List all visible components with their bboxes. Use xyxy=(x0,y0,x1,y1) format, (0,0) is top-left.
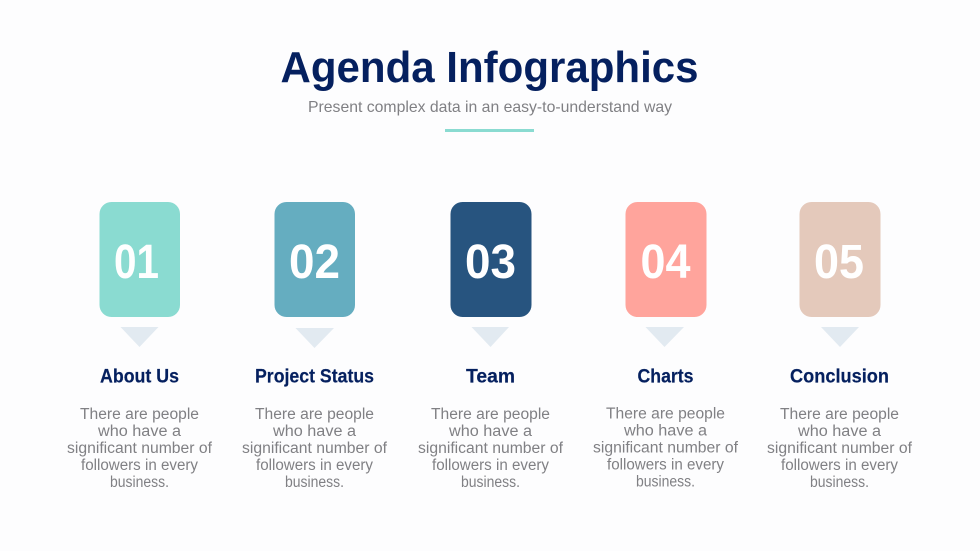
body text 02: business. xyxy=(285,474,344,491)
title underline xyxy=(445,129,534,132)
body text 03: followers in every xyxy=(432,457,549,474)
body text 01: significant number of xyxy=(67,440,213,457)
heading: About Us: About Us xyxy=(100,366,179,388)
number 05: 05 xyxy=(814,236,864,289)
pointer triangle 05 xyxy=(821,327,859,347)
panel: 04 Charts xyxy=(593,202,739,490)
body text 01: who have a xyxy=(97,423,181,440)
body text 03: who have a xyxy=(448,423,532,440)
heading: Conclusion: Conclusion xyxy=(790,366,889,388)
body text 04: who have a xyxy=(623,422,707,440)
pointer triangle 03 xyxy=(472,327,509,347)
body text 05: who have a xyxy=(797,423,881,440)
panel: 05 Conclusion xyxy=(767,202,913,491)
badge 04 xyxy=(626,202,706,317)
body text 03: business. xyxy=(461,474,520,491)
body text 01: There are people xyxy=(80,406,199,423)
body text 05: business. xyxy=(810,474,869,491)
heading: Charts: Charts xyxy=(638,366,694,388)
badge 03 xyxy=(450,202,532,317)
body text 04: significant number of xyxy=(593,440,739,456)
number 03: 03 xyxy=(465,236,516,289)
number 01: 01 xyxy=(114,236,159,289)
body text 01 xyxy=(67,406,213,491)
body text 02: significant number of xyxy=(242,440,388,457)
pointer triangle 04 xyxy=(646,327,684,347)
pointer triangle 02 xyxy=(296,328,334,348)
body text 05: There are people xyxy=(780,406,899,423)
body text 02: There are people xyxy=(255,406,374,423)
body text 02: who have a xyxy=(272,423,356,440)
body text 01: followers in every xyxy=(81,457,198,474)
body text 03: significant number of xyxy=(418,440,564,457)
body text 04: There are people xyxy=(606,406,725,422)
pointer triangle 01 xyxy=(120,327,158,347)
body text 05: followers in every xyxy=(781,457,898,474)
body text 04 xyxy=(593,406,739,490)
body text 04: business. xyxy=(636,474,695,490)
title: Agenda Infographics xyxy=(280,43,698,92)
body text 05 xyxy=(767,406,913,491)
number 02: 02 xyxy=(289,236,340,289)
badge 02 xyxy=(274,202,355,317)
body text 02: followers in every xyxy=(256,457,373,474)
subtitle: Present complex data in an easy-to-understand way xyxy=(308,99,672,116)
body text 05: significant number of xyxy=(767,440,913,457)
badge 01 xyxy=(100,202,180,317)
heading: Project Status: Project Status xyxy=(255,366,374,388)
body text 03: There are people xyxy=(431,406,550,423)
body text 02 xyxy=(242,406,388,491)
body text 03 xyxy=(418,406,564,491)
heading: Team: Team xyxy=(466,366,515,388)
number 04: 04 xyxy=(640,236,691,289)
body text 04: followers in every xyxy=(607,456,724,474)
panel: 03 Team xyxy=(418,202,564,491)
body text 01: business. xyxy=(110,474,169,491)
badge 05 xyxy=(800,202,880,317)
panel: 01 About Us xyxy=(67,202,213,491)
panel: 02 Project Status xyxy=(242,202,388,491)
